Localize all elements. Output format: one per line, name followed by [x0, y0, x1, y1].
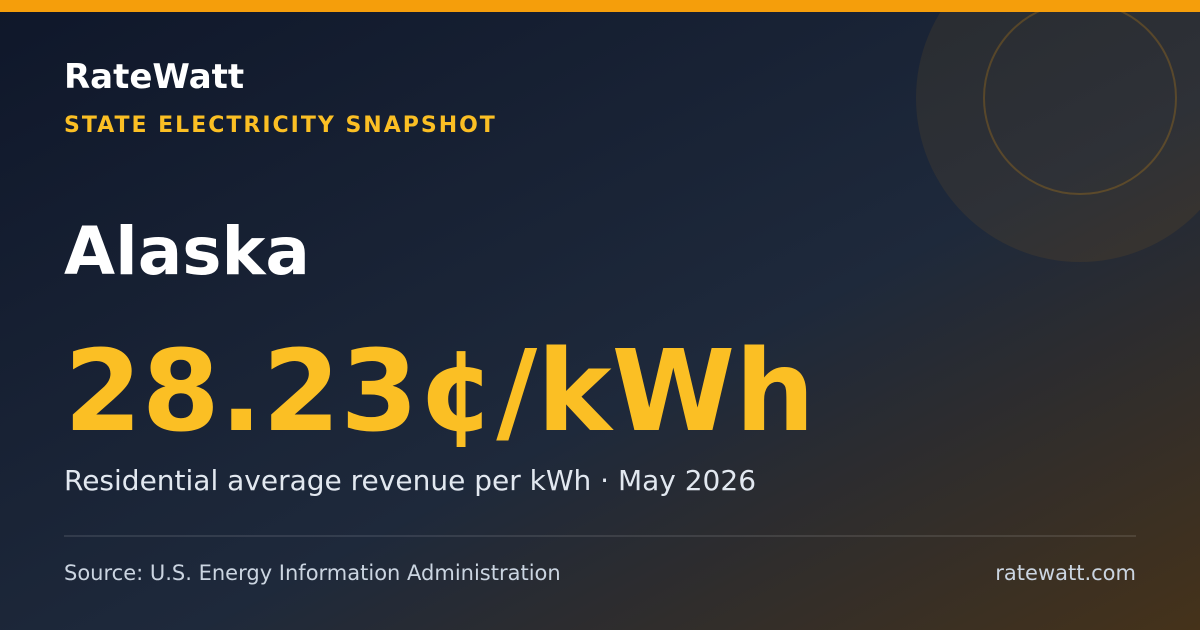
divider — [64, 535, 1136, 537]
rate description: Residential average revenue per kWh · May 2026 — [64, 464, 756, 497]
source: Source: U.S. Energy Information Administration — [64, 561, 561, 585]
top accent bar — [0, 0, 1200, 12]
brand name: RateWatt — [64, 57, 244, 97]
website: ratewatt.com — [995, 561, 1136, 585]
rate value: 28.23¢/kWh — [64, 327, 815, 457]
decorative circle — [916, 0, 1200, 262]
decorative ring — [983, 1, 1177, 195]
subtitle: STATE ELECTRICITY SNAPSHOT — [64, 113, 497, 138]
state name: Alaska — [64, 213, 310, 290]
